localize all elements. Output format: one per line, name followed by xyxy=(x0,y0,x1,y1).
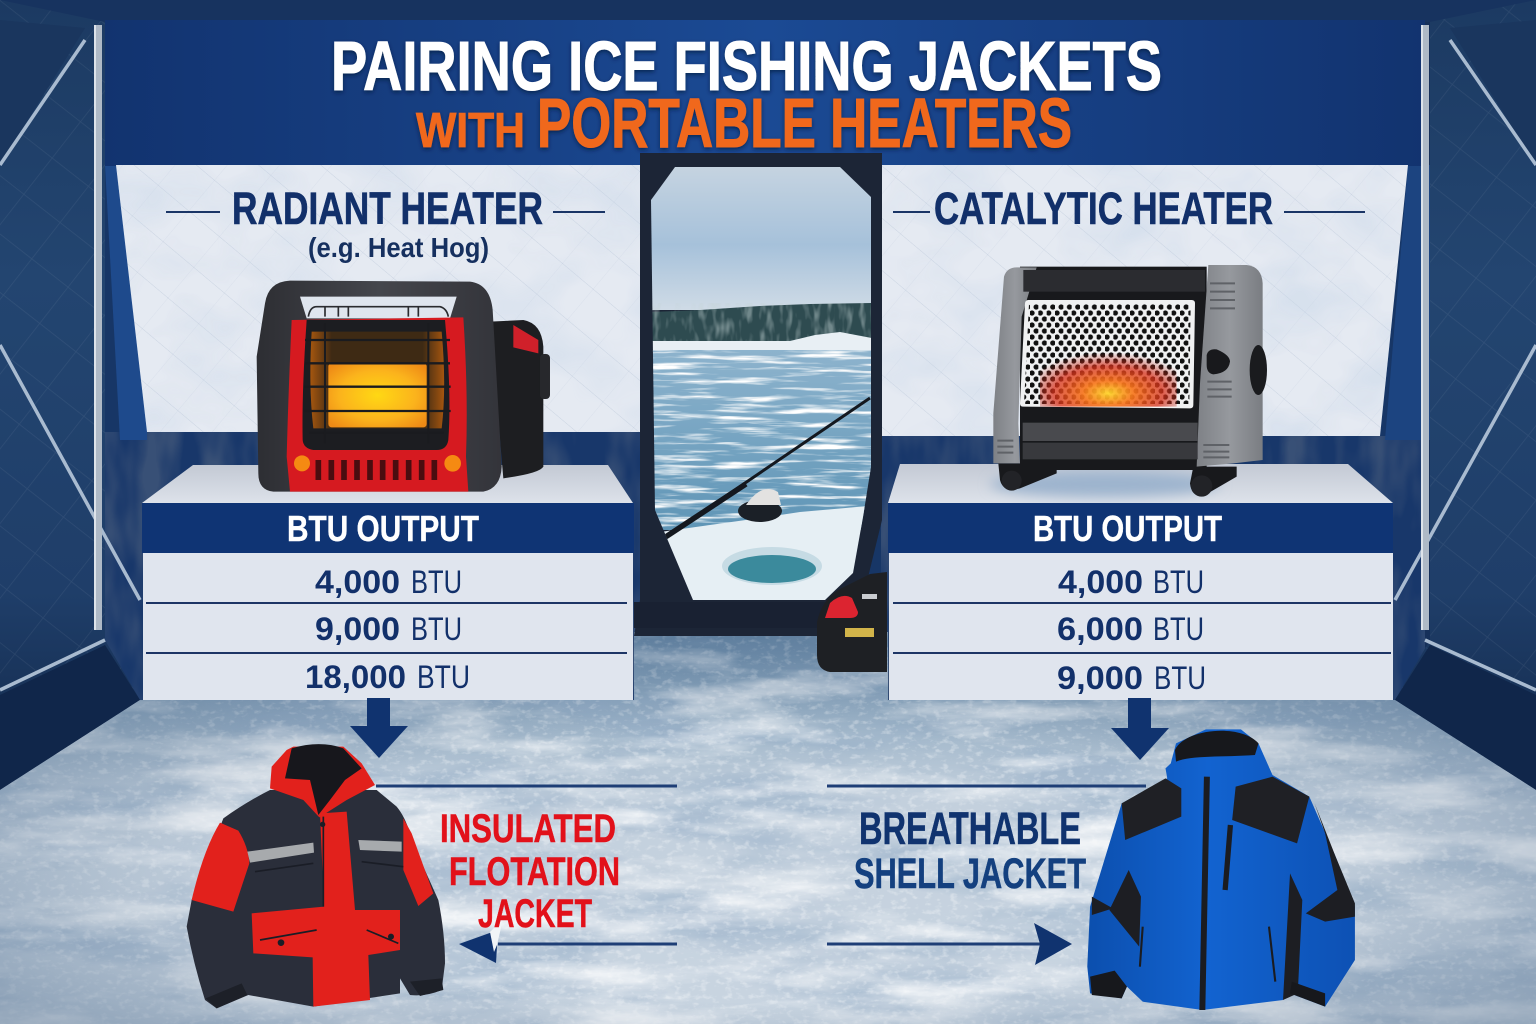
table: radiant BTU output: BTU xyxy=(417,659,470,695)
table: catalytic BTU output: BTU xyxy=(1153,611,1204,647)
heading: catalytic heater: CATALYTIC HEATER xyxy=(934,183,1273,234)
icon: catalytic heater xyxy=(993,265,1267,497)
table: catalytic BTU output: BTU xyxy=(1153,564,1204,600)
tent background xyxy=(0,0,1536,700)
text: breathable shell jacket: SHELL JACKET xyxy=(854,850,1086,898)
icon: breathable shell jacket xyxy=(1087,729,1355,1010)
table: catalytic BTU output: 4,000 xyxy=(1058,564,1143,600)
text: insulated flotation jacket xyxy=(440,807,620,936)
icon: radiant heater xyxy=(257,281,550,492)
text: breathable shell jacket xyxy=(854,803,1086,898)
text: insulated flotation jacket: JACKET xyxy=(478,892,592,936)
heading: radiant heater: (e.g. Heat Hog) xyxy=(308,232,489,263)
text: breathable shell jacket: BREATHABLE xyxy=(859,803,1081,854)
table: radiant BTU output: BTU xyxy=(411,564,462,600)
title xyxy=(331,27,1162,162)
title: PAIRING ICE FISHING JACKETS xyxy=(331,27,1162,105)
table: radiant BTU output: 9,000 xyxy=(315,611,400,647)
table: catalytic BTU output: 9,000 xyxy=(1057,660,1143,696)
table: radiant BTU output xyxy=(142,465,634,700)
ice floor xyxy=(0,632,1536,1024)
title: PORTABLE HEATERS xyxy=(537,84,1072,162)
table: catalytic BTU output: BTU xyxy=(1154,660,1206,696)
heading: radiant heater xyxy=(166,183,605,263)
text: insulated flotation jacket: INSULATED xyxy=(440,807,616,851)
connector lines: insulated jacket xyxy=(376,786,677,963)
table: radiant BTU output: 4,000 xyxy=(315,564,400,600)
arrow: radiant table to insulated jacket xyxy=(350,698,408,758)
icon: insulated flotation jacket xyxy=(187,744,445,1008)
panel: left insulated backdrop xyxy=(116,165,640,432)
table: radiant BTU output: BTU xyxy=(411,611,462,647)
panel: right insulated backdrop xyxy=(881,165,1408,436)
title: WITH xyxy=(416,104,525,158)
heading: radiant heater: RADIANT HEATER xyxy=(232,183,543,234)
battery box xyxy=(817,572,887,672)
connector lines: shell jacket xyxy=(827,786,1146,965)
table: catalytic BTU output xyxy=(888,464,1393,700)
text: insulated flotation jacket: FLOTATION xyxy=(449,850,620,894)
table: catalytic BTU output: BTU OUTPUT xyxy=(1033,508,1222,549)
table: catalytic BTU output: 6,000 xyxy=(1057,611,1143,647)
table: radiant BTU output: BTU OUTPUT xyxy=(287,508,479,549)
table: radiant BTU output: 18,000 xyxy=(305,659,406,695)
tent door with frozen lake view xyxy=(634,153,882,636)
arrow: catalytic table to shell jacket xyxy=(1111,698,1169,760)
